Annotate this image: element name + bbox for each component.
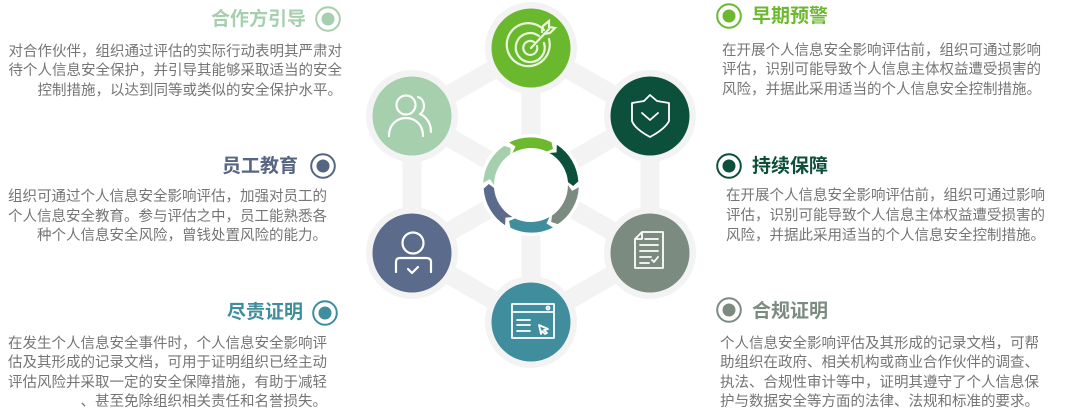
ring arrow: green bbox=[509, 137, 553, 153]
bullet: staff education bbox=[311, 154, 335, 178]
node: teal browser icon bbox=[485, 276, 577, 368]
text: partner guidance: 待个人信息安全保护，并引导其能够采取适当的安全 bbox=[8, 61, 342, 79]
text: staff education: 种个人信息安全风险，曾钱处置风险的能力。 bbox=[37, 226, 327, 244]
ring arrow: grey bbox=[548, 182, 583, 228]
text: compliance proof: 护与数据安全等方面的法律、法规和标准的要求。 bbox=[720, 392, 1039, 410]
heading: due diligence proof: 尽责证明 bbox=[227, 301, 303, 323]
bullet: early warning bbox=[717, 4, 741, 28]
text: continuous assurance bbox=[726, 186, 1045, 244]
node: shield icon bbox=[604, 70, 696, 162]
heading: early warning: 早期预警 bbox=[752, 5, 828, 27]
node: light green people icon bbox=[366, 70, 458, 162]
text: early warning: 在开展个人信息安全影响评估前，组织可通过影响 bbox=[722, 41, 1041, 59]
text: early warning bbox=[722, 41, 1041, 98]
text: partner guidance: 对合作伙伴，组织通过评估的实际行动表明其严肃对 bbox=[8, 43, 342, 60]
heading: partner guidance: 合作方引导 bbox=[211, 7, 306, 30]
bullet: due diligence proof bbox=[313, 301, 337, 325]
ring arrow: slate bbox=[479, 182, 514, 228]
ring arrow: light green bbox=[479, 142, 514, 188]
text: due diligence proof: 在发生个人信息安全事件时，个人信息安全影响评 bbox=[8, 334, 327, 352]
text: early warning: 评估，识别可能导致个人信息主体权益遭受损害的 bbox=[722, 61, 1041, 78]
text: staff education: 个人信息安全教育。参与评估之中，员工能熟悉各 bbox=[8, 207, 327, 225]
node: slate person check icon bbox=[366, 207, 458, 299]
heading: staff education: 员工教育 bbox=[222, 154, 298, 177]
node: grey document icon bbox=[604, 207, 696, 299]
text: due diligence proof: 评估风险并采取一定的安全保障措施，有助于减轻 bbox=[8, 373, 327, 391]
bullet: partner guidance bbox=[316, 7, 340, 31]
panel: staff education bbox=[8, 154, 335, 244]
bullet: continuous assurance bbox=[717, 154, 741, 178]
text: compliance proof: 助组织在政府、相关机构或商业合作伙伴的调查、 bbox=[720, 354, 1039, 371]
panel: partner guidance bbox=[8, 7, 342, 99]
text: due diligence proof: 估及其形成的记录文档，可用于证明组织已经主动 bbox=[8, 354, 327, 371]
central cycle ring bbox=[479, 134, 583, 236]
text: staff education: 组织可通过个人信息安全影响评估，加强对员工的 bbox=[8, 187, 327, 205]
panel: continuous assurance bbox=[717, 154, 1045, 244]
text: continuous assurance: 在开展个人信息安全影响评估前，组织可通过影响 bbox=[726, 186, 1045, 204]
text: staff education bbox=[8, 187, 327, 244]
text: due diligence proof bbox=[8, 334, 327, 410]
ring arrow: dark green bbox=[548, 142, 583, 188]
ring arrow: teal bbox=[509, 217, 553, 233]
heading: compliance proof: 合规证明 bbox=[752, 300, 828, 322]
bullet: compliance proof bbox=[717, 298, 741, 322]
text: early warning: 风险，并据此采用适当的个人信息安全控制措施。 bbox=[722, 80, 1041, 98]
text: partner guidance bbox=[8, 43, 342, 99]
text: compliance proof: 执法、合规性审计等中，证明其遵守了个人信息保 bbox=[720, 373, 1039, 391]
panel: due diligence proof bbox=[8, 301, 337, 410]
heading: continuous assurance: 持续保障 bbox=[752, 154, 828, 177]
text: continuous assurance: 评估，识别可能导致个人信息主体权益遭受损害的 bbox=[726, 207, 1045, 224]
text: compliance proof: 个人信息安全影响评估及其形成的记录文档，可帮 bbox=[720, 334, 1039, 352]
hexagon connector network bbox=[412, 48, 650, 322]
text: partner guidance: 控制措施，以达到同等或类似的安全保护水平。 bbox=[38, 81, 342, 99]
text: continuous assurance: 风险，并据此采用适当的个人信息安全控制措施。 bbox=[726, 226, 1045, 244]
text: compliance proof bbox=[720, 334, 1039, 410]
panel: compliance proof bbox=[717, 298, 1039, 410]
node: target icon bbox=[485, 2, 577, 94]
panel: early warning bbox=[717, 4, 1041, 98]
text: due diligence proof: 、甚至免除组织相关责任和名誉损失。 bbox=[80, 393, 327, 410]
